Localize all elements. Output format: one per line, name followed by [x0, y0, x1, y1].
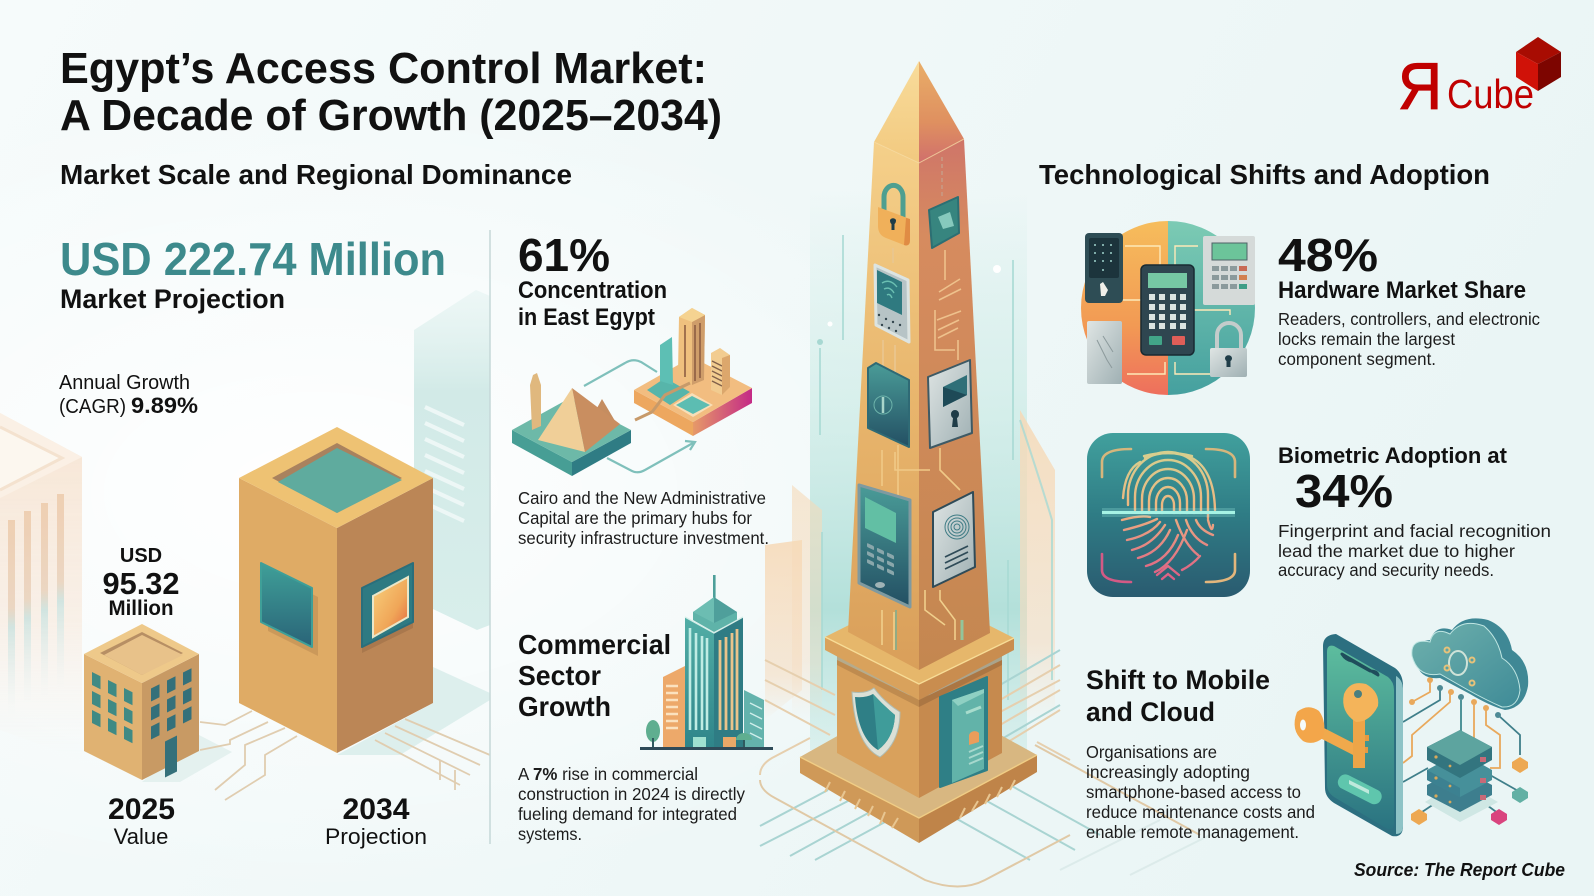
- heading: technological shifts: Technological Shifts and Adoption: [1039, 159, 1490, 190]
- icon: door panel: [940, 677, 987, 787]
- silver reader: [1087, 321, 1122, 384]
- text: cairo: Cairo and the New Administrative: [518, 488, 766, 508]
- fingerprint ridges: [1122, 452, 1215, 579]
- stat: biometric adoption: lead the market due to higher: [1278, 541, 1515, 561]
- cagr: Annual Growth: [59, 372, 190, 394]
- wires: [1403, 680, 1520, 814]
- padlock: [1210, 323, 1247, 377]
- text: commercial: [518, 764, 745, 844]
- text: commercial: fueling demand for integrated: [518, 804, 737, 824]
- grey keypad: [1203, 236, 1255, 305]
- commercial sector heading: Growth: [518, 691, 611, 722]
- shaft and pyramidion: [848, 61, 990, 670]
- stat: biometric adoption: accuracy and security needs.: [1278, 560, 1494, 580]
- market projection figure: Market Projection: [60, 284, 285, 314]
- icon: hardware devices: [1081, 221, 1255, 395]
- stat: biometric adoption: Biometric Adoption at: [1278, 443, 1508, 468]
- logo: Я: [1398, 49, 1442, 123]
- market projection figure: USD 222.74 Million: [60, 233, 446, 285]
- icon: shield: [852, 688, 900, 757]
- stat: 61 percent: Concentration: [518, 277, 667, 304]
- title: A Decade of Growth (2025–2034): [60, 91, 722, 140]
- arrows: [584, 360, 695, 472]
- stat: biometric adoption: 34%: [1295, 465, 1393, 517]
- chart labels: [102, 545, 427, 849]
- text: cairo: [518, 488, 769, 548]
- icon: fingerprint reader: [875, 265, 909, 342]
- mobile and cloud text: Organisations are: [1086, 742, 1217, 762]
- phone: [1323, 634, 1403, 836]
- base: [800, 690, 1037, 843]
- black reader: [1085, 233, 1123, 303]
- market projection figure: [60, 233, 446, 314]
- ghost tower teal: [414, 290, 490, 630]
- title: Egypt’s Access Control Market:: [60, 44, 707, 93]
- source note: Source: The Report Cube: [1354, 860, 1565, 880]
- chart: 2025 building: [84, 624, 199, 784]
- commercial sector heading: [518, 629, 671, 722]
- mobile and cloud text: smartphone-based access to: [1086, 782, 1301, 802]
- stat: biometric adoption: Fingerprint and facial recognition: [1278, 521, 1551, 541]
- stat: 61 percent: in East Egypt: [518, 304, 655, 331]
- mobile and cloud text: [1086, 665, 1315, 842]
- stat: 61 percent: [518, 229, 667, 331]
- icon: map of Cairo and New Capital: [512, 308, 752, 476]
- keypad: [1141, 265, 1194, 355]
- icon: fingerprint scan: [1087, 433, 1250, 597]
- stat: hardware share: Readers, controllers, and electronic: [1278, 309, 1540, 329]
- right platform: [634, 308, 752, 436]
- icon: grey lock: [928, 360, 972, 448]
- circuit traces under towers: [142, 667, 490, 800]
- icon: phone, key, cloud and server: [1295, 618, 1528, 836]
- scan line: [1102, 508, 1235, 517]
- chart labels: USD: [120, 545, 162, 567]
- obelisk: [800, 61, 1037, 843]
- icon: padlock: [878, 185, 910, 245]
- text: cairo: security infrastructure investment.: [518, 528, 769, 548]
- text: commercial: A 7% rise in commercial: [518, 764, 698, 784]
- title: [60, 44, 722, 140]
- collar: [825, 590, 1014, 700]
- stat: hardware share: Hardware Market Share: [1278, 277, 1526, 304]
- icon: grey fingerprint card: [933, 492, 975, 587]
- stat: 61 percent: 61%: [518, 229, 610, 281]
- colour wheel: [1081, 221, 1255, 395]
- icon: teal reader: [868, 363, 909, 447]
- heading: market scale: Market Scale and Regional Dominance: [60, 159, 572, 190]
- stat: hardware share: component segment.: [1278, 349, 1436, 369]
- chart labels: Million: [108, 597, 174, 620]
- key vertical: [1343, 683, 1378, 768]
- mobile and cloud text: increasingly adopting: [1086, 762, 1250, 782]
- mobile and cloud text: and Cloud: [1086, 697, 1215, 727]
- pedestal: [837, 650, 1002, 798]
- icon: commercial tower: [640, 575, 773, 750]
- mobile and cloud text: enable remote management.: [1086, 822, 1299, 842]
- stat: hardware share: [1278, 229, 1540, 369]
- text: cairo: Capital are the primary hubs for: [518, 508, 752, 528]
- logo: [1398, 37, 1561, 123]
- stat: hardware share: 48%: [1278, 229, 1378, 281]
- chart: 2034 tower: [239, 427, 433, 753]
- commercial sector heading: Sector: [518, 660, 601, 691]
- chart labels: 95.32: [102, 566, 180, 601]
- key horizontal: [1295, 707, 1357, 757]
- cloud: [1412, 618, 1528, 710]
- cagr: [59, 372, 198, 418]
- cagr: (CAGR): [59, 396, 126, 418]
- icon: teal tile: [929, 197, 959, 248]
- chart labels: 2034: [342, 793, 410, 826]
- text: commercial: systems.: [518, 824, 582, 844]
- cagr: 9.89%: [131, 393, 198, 418]
- stat: biometric adoption: [1278, 443, 1551, 580]
- text: commercial: construction in 2024 is directly: [518, 784, 745, 804]
- mobile and cloud text: Shift to Mobile: [1086, 665, 1270, 695]
- icon: keypad terminal: [859, 485, 910, 607]
- chart labels: 2025: [108, 793, 175, 826]
- server stack: [1425, 730, 1498, 822]
- stat: hardware share: locks remain the largest: [1278, 329, 1455, 349]
- left platform: [512, 373, 631, 476]
- circuit detail on shaft: [882, 157, 962, 650]
- chart labels: Projection: [325, 824, 427, 849]
- chart labels: Value: [114, 824, 168, 849]
- commercial sector heading: Commercial: [518, 629, 671, 660]
- ghost building left: [0, 413, 82, 760]
- mobile and cloud text: reduce maintenance costs and: [1086, 802, 1315, 822]
- logo: Cube: [1447, 71, 1534, 117]
